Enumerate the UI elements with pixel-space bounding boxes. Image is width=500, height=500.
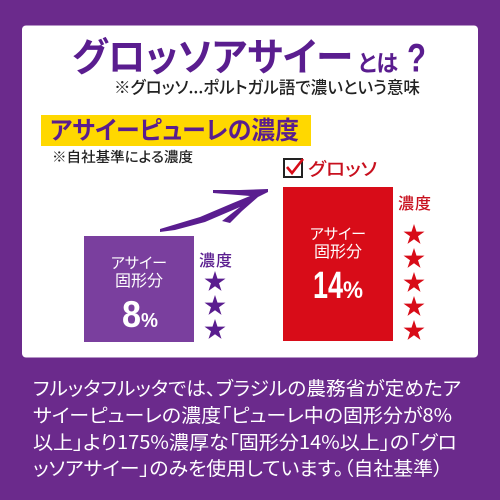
body text: サイーピューレの濃度「ピューレ中の固形分が8% [33, 401, 452, 428]
label: grosso: グロッソ [308, 156, 377, 182]
label: density, purple: 濃度 [199, 247, 232, 271]
bar: standard acai 8%: 固形分 [115, 267, 163, 291]
bar: standard acai 8%: % [141, 310, 158, 332]
body text: 以上」より175%濃厚な「固形分14%以上」の「グロ [33, 428, 457, 455]
bar: grosso acai 14%: 14 [313, 265, 343, 307]
bar: standard acai 8%: 8 [122, 294, 141, 335]
heading: yellow band: アサイーピューレの濃度 [50, 111, 299, 147]
stars: red five [404, 224, 424, 340]
bar: grosso acai 14%: アサイー [310, 223, 366, 244]
bar: grosso acai 14% [283, 187, 393, 341]
label: density, red: 濃度 [398, 190, 431, 214]
body text: フルッタフルッタでは、ブラジルの農務省が定めたア [33, 374, 461, 401]
panel: white card [22, 26, 478, 358]
checkbox icon [284, 159, 303, 177]
note: in-house standard: ※自社基準による濃度 [52, 147, 193, 167]
stars: purple three [204, 271, 226, 339]
subtitle note: ※グロッソ...ポルトガル語で濃いという意味 [114, 74, 420, 98]
bar: standard acai 8% [84, 236, 194, 342]
title: とは [358, 44, 398, 78]
bar: standard acai 8%: アサイー [111, 252, 167, 273]
title: ? [407, 36, 426, 80]
bar: grosso acai 14%: % [343, 277, 363, 304]
bar: grosso acai 14%: 固形分 [314, 238, 362, 262]
body text: ッソアサイー」のみを使用しています。（自社基準） [33, 454, 443, 481]
title: グロッソアサイー [72, 27, 353, 83]
body text [33, 374, 461, 481]
arrow: rising brush stroke [160, 189, 268, 232]
